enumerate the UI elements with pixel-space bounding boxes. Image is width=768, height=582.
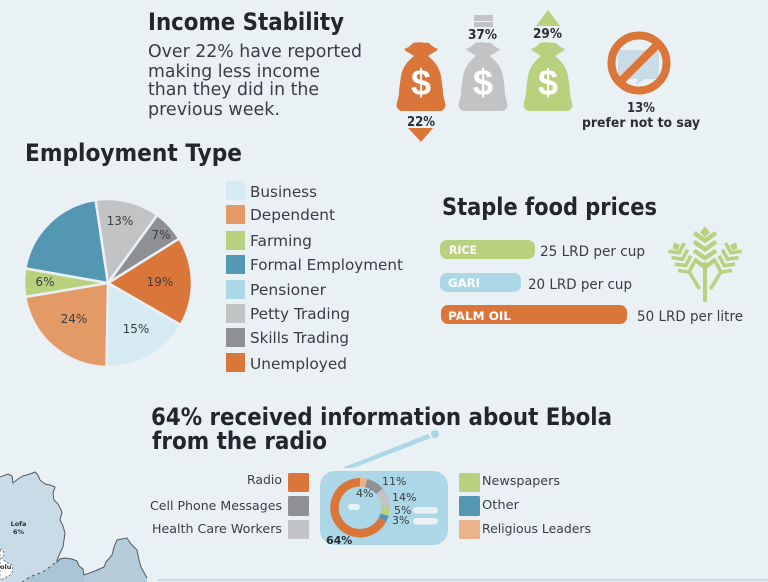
heading: ebola information from the radio: from the radio — [152, 427, 327, 455]
section: staple food prices — [440, 193, 744, 325]
pie labels: 6% — [35, 275, 55, 289]
section: ebola information — [150, 403, 612, 547]
heading: income stability: Income Stability — [148, 8, 344, 36]
bar: gari: 20 LRD per cup — [528, 277, 632, 293]
donut labels: 11% — [382, 475, 406, 488]
text block: income summary — [148, 42, 362, 120]
map label: Lofa: 6% — [13, 528, 24, 536]
legend: employment type: Formal Employment — [250, 256, 403, 274]
radio antenna — [342, 430, 439, 468]
legend: employment type: Business — [250, 183, 317, 201]
map: southern county — [22, 558, 84, 582]
legend: left column: Health Care Workers — [152, 521, 282, 536]
bar: gari: GARI — [448, 276, 480, 290]
map of Liberia counties — [0, 472, 147, 582]
legend: employment type — [226, 181, 403, 373]
pie chart: employment type — [24, 199, 192, 367]
map: county borders — [0, 472, 147, 582]
section: income stability — [148, 8, 700, 142]
pie labels: 13% — [107, 214, 133, 228]
donut labels: 3% — [392, 514, 409, 527]
label: prefer not to say — [582, 101, 700, 131]
pie labels — [35, 214, 173, 336]
donut labels — [326, 475, 416, 547]
bar: gari — [440, 273, 632, 293]
legend: right column: Other — [482, 497, 520, 512]
label: prefer not to say: 13% — [627, 101, 655, 116]
bar: rice — [440, 240, 645, 260]
icon: radio with donut chart — [320, 430, 448, 547]
legend: employment type: Petty Trading — [250, 305, 350, 323]
map: eastern county — [84, 538, 147, 582]
map label: Lofa: Lofa — [11, 520, 26, 528]
map: Lofa county — [0, 472, 65, 582]
donut chart: information sources — [335, 482, 386, 533]
legend: employment type: Unemployed — [250, 355, 347, 373]
bar: palm oil: 50 LRD per litre — [637, 309, 743, 325]
map label: county fragment: olu — [0, 563, 12, 571]
icon: prefer not to say, crossed speech bubble — [612, 36, 666, 90]
text block: income summary: than they did in the — [148, 80, 319, 100]
map: white county — [0, 549, 13, 580]
heading: ebola information from the radio — [151, 403, 612, 455]
icon: wheat — [666, 226, 744, 302]
icon: orange money bag, 22% less — [396, 42, 446, 142]
bar: rice: 25 LRD per cup — [540, 244, 645, 260]
legend: right column: Religious Leaders — [482, 521, 591, 536]
icon: grey money bag, 37% same — [458, 15, 508, 111]
donut labels: 4% — [356, 487, 373, 500]
icon: orange money bag, 22% less: $ — [411, 62, 431, 103]
radio body — [320, 471, 448, 545]
icon: green money bag, 29% more: 29% — [533, 27, 562, 42]
legend: right column — [459, 473, 591, 539]
bar: palm oil — [441, 305, 743, 325]
legend: employment type: Pensioner — [250, 281, 327, 299]
baseline rule — [157, 580, 768, 581]
radio buttons — [348, 504, 438, 524]
legend: employment type: Dependent — [250, 206, 335, 224]
map label: Lofa — [11, 520, 26, 536]
text block: income summary: previous week. — [148, 100, 280, 120]
icon: green money bag, 29% more: $ — [538, 62, 558, 103]
section: employment type — [24, 139, 403, 373]
legend: employment type: Skills Trading — [250, 329, 349, 347]
donut labels: 64% — [326, 534, 352, 547]
text block: income summary: Over 22% have reported — [148, 42, 362, 62]
icon: grey money bag, 37% same: 37% — [468, 28, 497, 43]
icon: green money bag, 29% more — [524, 10, 572, 111]
text block: income summary: making less income — [148, 62, 320, 82]
heading: ebola information from the radio: 64% received information about Ebola — [151, 403, 612, 431]
label: prefer not to say: prefer not to say — [582, 116, 700, 131]
pie labels: 19% — [147, 275, 173, 289]
heading: employment type: Employment Type — [25, 139, 242, 167]
bar: rice: RICE — [449, 243, 477, 257]
pie labels: 15% — [123, 322, 149, 336]
pie labels: 24% — [61, 312, 87, 326]
donut labels: 14% — [392, 491, 416, 504]
bar: palm oil: PALM OIL — [448, 309, 512, 323]
pie labels: 7% — [151, 228, 171, 242]
legend: left column — [150, 472, 309, 539]
heading: staple food prices: Staple food prices — [442, 193, 657, 221]
legend: left column: Cell Phone Messages — [150, 498, 282, 513]
donut labels: 5% — [394, 504, 411, 517]
legend: employment type: Farming — [250, 232, 312, 250]
legend: left column: Radio — [247, 472, 282, 487]
icon: orange money bag, 22% less: 22% — [407, 115, 435, 130]
legend: right column: Newspapers — [482, 473, 560, 488]
icon: grey money bag, 37% same: $ — [473, 62, 493, 103]
